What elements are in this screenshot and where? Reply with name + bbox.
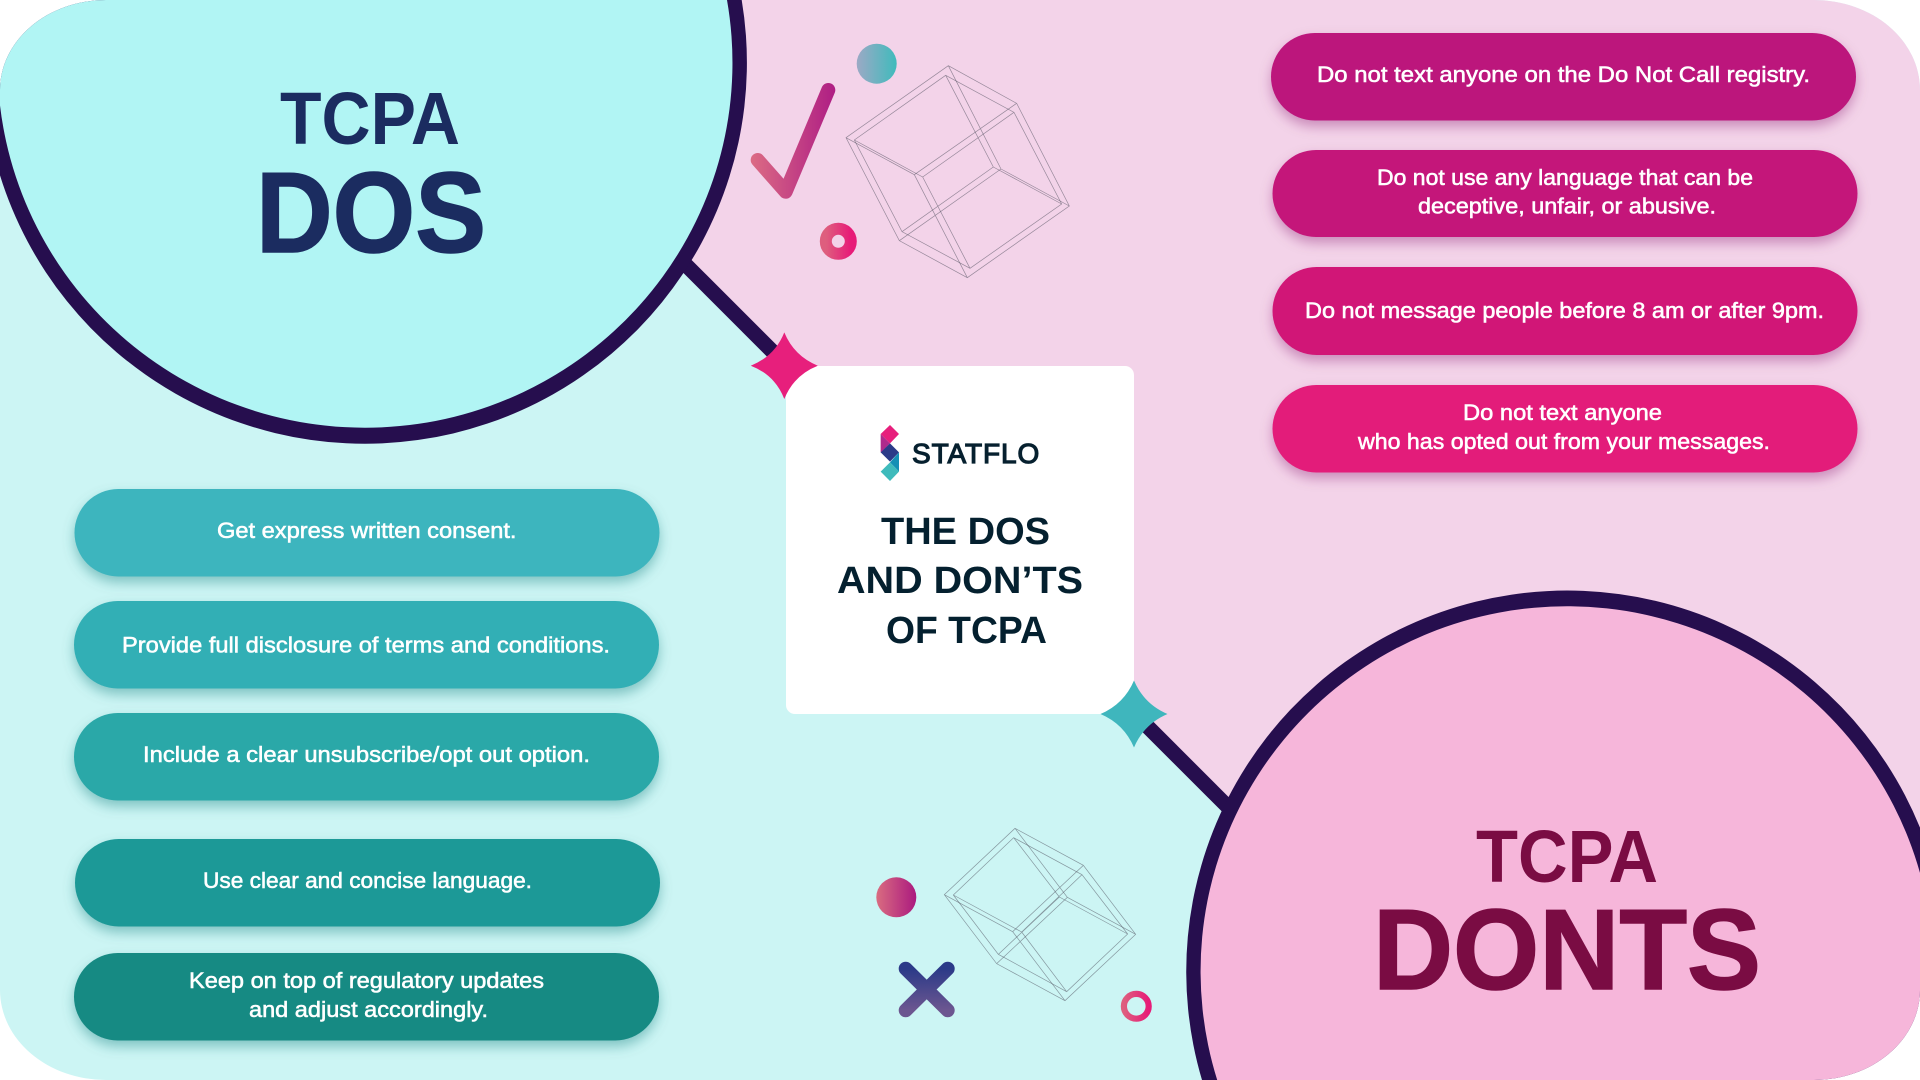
logo: Statflo wordmark: STATFLO bbox=[912, 438, 1039, 469]
circle: TCPA dos bbox=[0, 0, 747, 444]
pill: do not text registry: Do not text anyone on the Do Not Call registry. bbox=[1317, 62, 1810, 87]
pill: message hours: Do not message people before 8 am or after 9pm. bbox=[1305, 298, 1824, 323]
pill: deceptive language bbox=[1272, 150, 1858, 237]
heading: TCPA DOS: TCPA bbox=[280, 77, 460, 160]
pill: full disclosure: Provide full disclosure of terms and conditions. bbox=[122, 632, 610, 658]
background: pink upper-right bbox=[692, 0, 1920, 828]
heading: TCPA DONTS: TCPA bbox=[1476, 815, 1658, 898]
wireframe cube: top bbox=[846, 66, 1069, 278]
icon: magenta dot bbox=[876, 877, 916, 917]
icon: pink donut bbox=[826, 229, 851, 254]
pill: deceptive language: deceptive, unfair, or abusive. bbox=[1418, 194, 1716, 218]
heading: TCPA DOS bbox=[256, 77, 486, 277]
logo: Statflo mark bbox=[881, 425, 899, 481]
card title bbox=[837, 511, 1083, 652]
pill: opted out: Do not text anyone bbox=[1463, 400, 1662, 425]
connector line between circles bbox=[680, 259, 1235, 814]
icon: pink star bbox=[751, 332, 818, 399]
heading: TCPA DOS: DOS bbox=[256, 150, 486, 277]
pill: full disclosure bbox=[74, 601, 659, 688]
heading: TCPA DONTS: DONTS bbox=[1373, 887, 1761, 1014]
pill: opted out bbox=[1272, 385, 1858, 472]
pill: clear language bbox=[75, 839, 660, 926]
pill: clear language: Use clear and concise language. bbox=[203, 868, 532, 893]
pill: unsubscribe bbox=[74, 713, 659, 800]
icon: teal-grey dot bbox=[857, 44, 897, 84]
card title: THE DOS bbox=[881, 511, 1050, 553]
pill: regulatory updates: and adjust accordingly. bbox=[249, 997, 488, 1022]
pill: opted out: who has opted out from your messages. bbox=[1357, 429, 1770, 454]
card title: OF TCPA bbox=[886, 610, 1047, 652]
card title: AND DON’TS bbox=[837, 560, 1083, 602]
pill: do not text registry bbox=[1271, 33, 1856, 120]
icon: check mark bbox=[758, 90, 828, 192]
pill: regulatory updates: Keep on top of regulatory updates bbox=[189, 968, 544, 993]
icon: X mark bbox=[906, 969, 948, 1010]
wireframe cube: bottom bbox=[944, 828, 1136, 1001]
pill: unsubscribe: Include a clear unsubscribe/opt out option. bbox=[143, 742, 590, 767]
pill: deceptive language: Do not use any language that can be bbox=[1377, 165, 1753, 190]
pill: regulatory updates bbox=[74, 953, 659, 1040]
center card bbox=[786, 366, 1134, 714]
pill: message hours bbox=[1272, 267, 1858, 355]
icon: teal star bbox=[1100, 680, 1168, 748]
pill: express consent bbox=[74, 489, 660, 576]
heading: TCPA DONTS bbox=[1373, 815, 1761, 1014]
icon: pink ring bbox=[1124, 994, 1149, 1019]
pill: express consent: Get express written consent. bbox=[217, 518, 516, 543]
circle: TCPA donts bbox=[1186, 591, 1920, 1080]
